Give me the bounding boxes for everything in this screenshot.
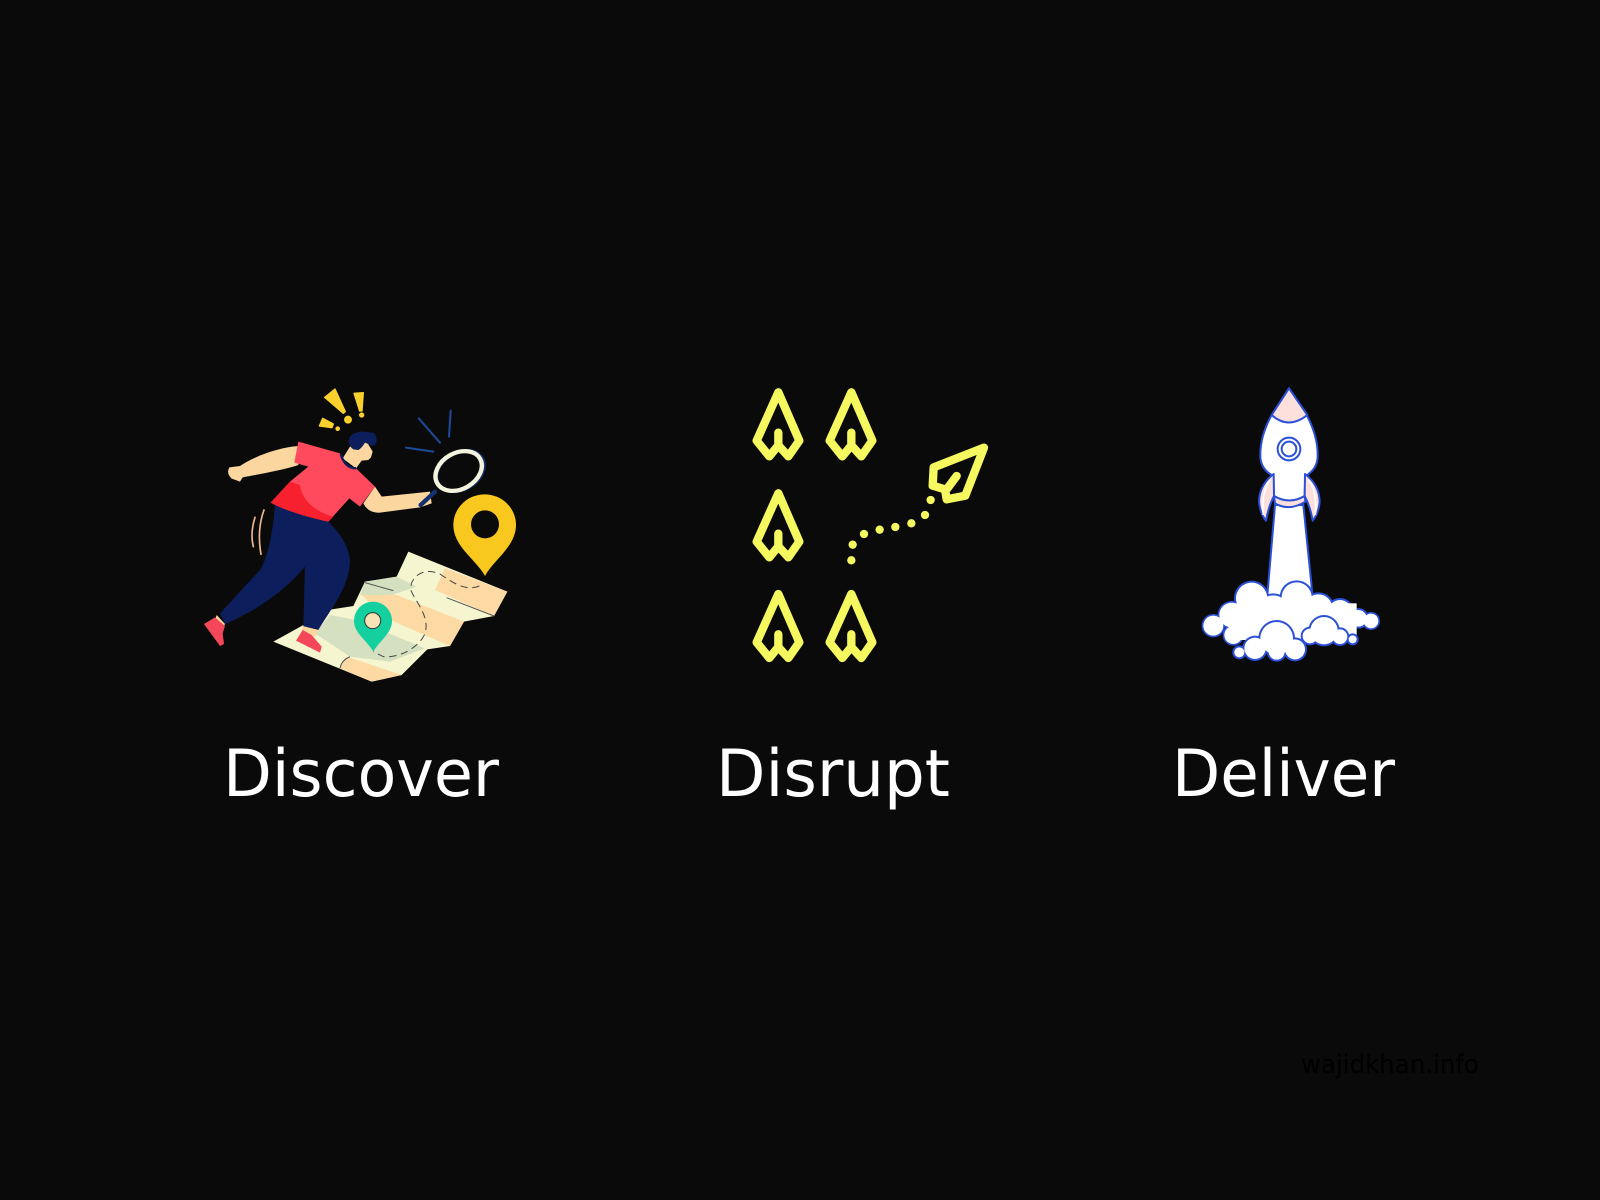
icon: rocket fins [1259, 474, 1320, 521]
icon: rocket exhaust trail [1267, 505, 1313, 603]
icon: smoke cloud [1202, 580, 1380, 662]
figure: running person [204, 432, 432, 653]
icon: breakaway paper arrow [933, 448, 984, 499]
icon: paper arrow middle left [757, 493, 799, 557]
watermark: wajidkhan.info [1301, 1050, 1479, 1080]
icon: yellow location pin [453, 494, 516, 576]
icon: paper arrow top right [830, 392, 872, 456]
icon: exclamation marks [319, 389, 364, 430]
panel: discover illustration [204, 389, 516, 682]
icon: paper arrow bottom left [757, 594, 799, 658]
icon: paper arrow top left [757, 392, 799, 456]
icon: folded map [273, 552, 507, 682]
icon: paper arrow bottom right [830, 594, 872, 658]
icon: rocket nose cone [1272, 388, 1307, 422]
icon: rocket base ring [1274, 496, 1305, 507]
icon: rocket body [1260, 388, 1318, 500]
icon: motion lines [252, 510, 264, 554]
icon: green location pin [354, 602, 392, 652]
label: Deliver: Deliver [1172, 737, 1395, 812]
dotted flight path [847, 496, 935, 564]
icon: rocket window [1278, 438, 1300, 460]
panel: disrupt illustration [757, 392, 984, 658]
label: Discover: Discover [223, 737, 499, 812]
icon: magnifying glass [421, 442, 491, 505]
panel: deliver illustration [1202, 388, 1380, 662]
label: Disrupt: Disrupt [716, 737, 950, 812]
icon: blue sparkle lines [406, 411, 451, 452]
